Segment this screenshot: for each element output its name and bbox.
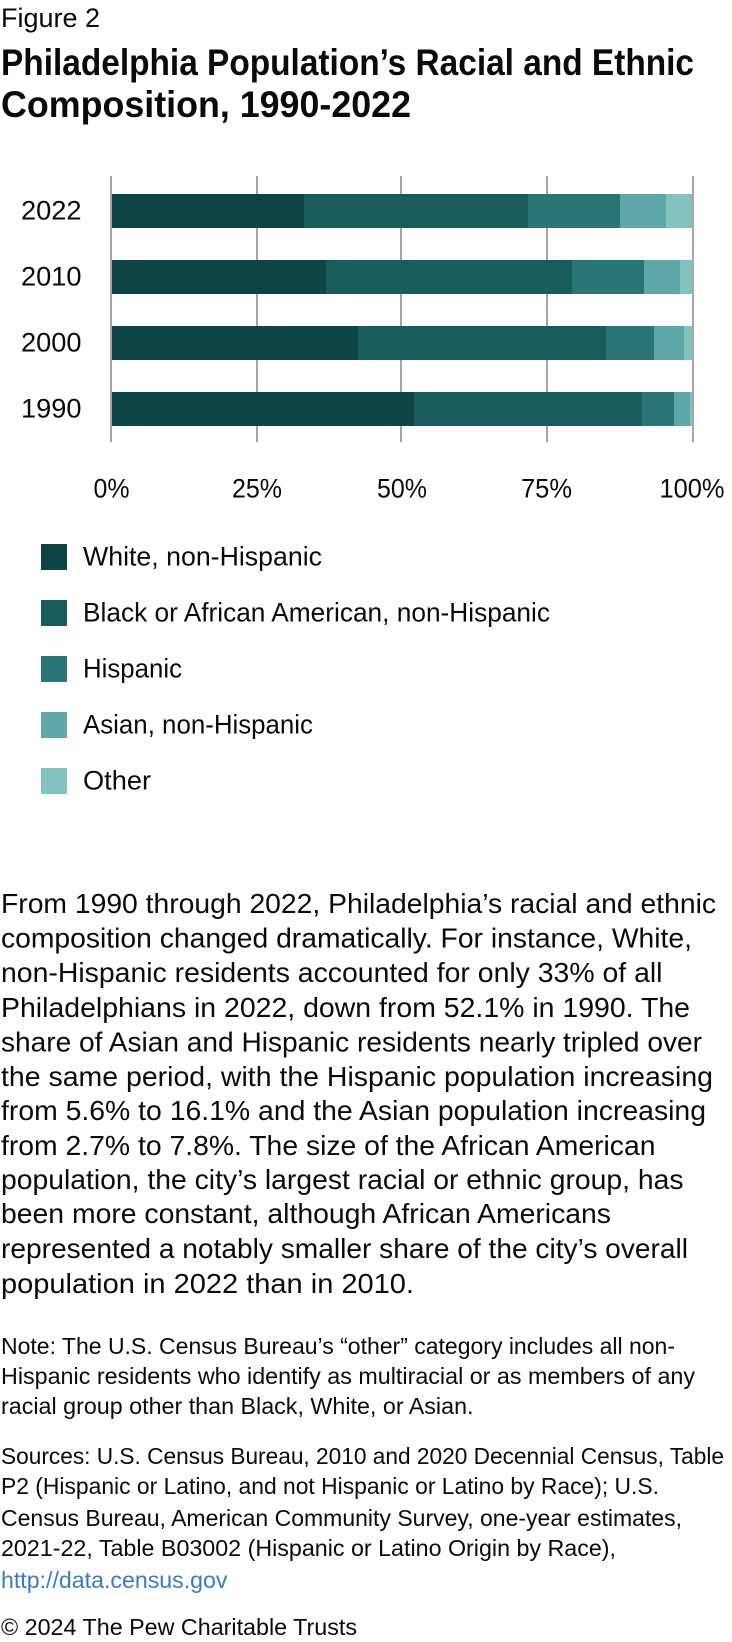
bar: 2010: [112, 260, 692, 294]
title: [1, 42, 694, 125]
legend item: Other: Other: [83, 766, 151, 796]
y axis labels: 1990: [21, 394, 82, 424]
body paragraph: represented a notably smaller share of the city’s overall: [1, 1233, 688, 1264]
y axis labels: [21, 196, 82, 424]
figure label: Figure 2: [1, 3, 100, 33]
copyright: © 2024 The Pew Charitable Trusts: [1, 1614, 357, 1640]
body paragraph: [1, 888, 716, 1299]
bar: 2000: [112, 326, 692, 360]
note: [1, 1333, 696, 1419]
body paragraph: non-Hispanic residents accounted for only 33% of all: [1, 957, 662, 988]
legend item: White, non-Hispanic: White, non-Hispanic: [83, 542, 322, 572]
body paragraph: From 1990 through 2022, Philadelphia’s racial and ethnic: [1, 888, 716, 919]
body paragraph: share of Asian and Hispanic residents nearly tripled over: [1, 1026, 702, 1058]
sources: http://data.census.gov: [1, 1567, 228, 1593]
x axis labels: 50%: [377, 474, 427, 504]
bar: 2022: [112, 194, 692, 228]
y axis labels: 2010: [21, 262, 82, 292]
bar: 1990: [112, 392, 692, 426]
legend item: Hispanic: Hispanic: [83, 654, 182, 684]
body paragraph: population, the city’s largest racial or ethnic group, has: [1, 1164, 684, 1195]
legend item: Asian, non-Hispanic: Asian, non-Hispanic: [83, 710, 313, 740]
sources: Sources: U.S. Census Bureau, 2010 and 2020 Decennial Census, Table: [1, 1443, 724, 1469]
x axis labels: 25%: [232, 474, 282, 504]
sources: P2 (Hispanic or Latino, and not Hispanic or Latino by Race); U.S.: [1, 1473, 659, 1499]
body paragraph: from 2.7% to 7.8%. The size of the African American: [1, 1130, 656, 1161]
sources: 2021-22, Table B03002 (Hispanic or Latino Origin by Race),: [1, 1535, 616, 1561]
sources: Census Bureau, American Community Survey, one-year estimates,: [1, 1505, 682, 1531]
note: Note: The U.S. Census Bureau’s “other” category includes all non-: [1, 1333, 675, 1359]
note: racial group other than Black, White, or Asian.: [1, 1393, 474, 1419]
legend item: Other: [41, 766, 151, 796]
stacked bar chart: [21, 176, 724, 504]
body paragraph: from 5.6% to 16.1% and the Asian population increasing: [1, 1095, 706, 1126]
y axis labels: 2000: [21, 328, 82, 358]
note: Hispanic residents who identify as multiracial or as members of any: [1, 1363, 696, 1389]
sources: [1, 1443, 724, 1593]
body paragraph: the same period, with the Hispanic population increasing: [1, 1061, 713, 1092]
body paragraph: population in 2022 than in 2010.: [1, 1268, 414, 1299]
x axis labels: 75%: [521, 474, 572, 504]
title: Composition, 1990-2022: [1, 84, 411, 125]
x axis labels: 0%: [94, 474, 130, 504]
legend: [41, 542, 550, 796]
legend item: Hispanic: [41, 654, 182, 684]
x axis labels: [94, 474, 724, 504]
body paragraph: composition changed dramatically. For instance, White,: [1, 922, 692, 954]
body paragraph: Philadelphians in 2022, down from 52.1% in 1990. The: [1, 992, 690, 1023]
body paragraph: been more constant, although African Americans: [1, 1198, 611, 1229]
x axis labels: 100%: [660, 474, 724, 504]
vertical grid lines: [110, 176, 694, 442]
legend item: Black or African American, non-Hispanic: Black or African American, non-Hispanic: [83, 598, 550, 628]
y axis labels: 2022: [21, 196, 82, 226]
